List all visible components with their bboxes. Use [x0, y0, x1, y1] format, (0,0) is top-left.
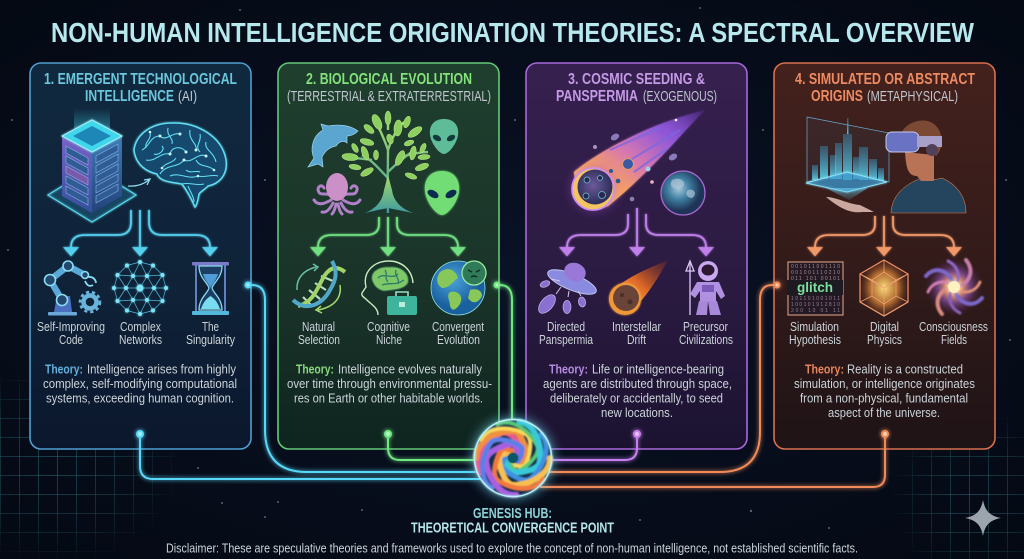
- heading: panel 4: 4. SIMULATED OR ABSTRACT: [795, 71, 975, 88]
- heading: panel 1: INTELLIGENCE: [85, 88, 174, 105]
- heading: panel 2: [287, 71, 491, 105]
- text: panel 2 theory: res on Earth or other habitable worlds.: [294, 390, 483, 406]
- label: genesis hub: GENESIS HUB:: [473, 505, 552, 522]
- heading: panel 1: 1. EMERGENT TECHNOLOGICAL: [44, 71, 237, 88]
- text: panel 2 theory: Theory:: [296, 362, 334, 376]
- labels: panel 4: Physics: [867, 333, 902, 347]
- connector: green lines to hub: [385, 282, 512, 460]
- labels: panel 4: Digital: [870, 320, 899, 334]
- labels: panel 4: Consciousness: [919, 320, 988, 334]
- icon: interstellar meteor: [609, 260, 668, 315]
- text: panel 4 theory: simulation, or intelligence originates: [794, 376, 975, 391]
- text: panel 3 theory: agents are distributed through space,: [543, 376, 732, 391]
- labels: panel 2: Natural: [302, 320, 335, 334]
- arrows: panel 1 branches: [65, 210, 216, 255]
- arrows: panel 4 branches: [809, 216, 960, 255]
- text: panel 4 theory: Theory:: [805, 362, 844, 376]
- labels: panel 2: Cognitive: [367, 320, 410, 334]
- labels: panel 2: Niche: [376, 333, 402, 347]
- text: panel 3 theory: deliberately or accidentally, to seed: [550, 390, 723, 406]
- icon: complex network: [112, 260, 168, 316]
- panel: emergent technological intelligence: [30, 63, 251, 449]
- icon: astronaut: [686, 261, 725, 315]
- text: panel 2 theory: over time through environmental pressu-: [287, 376, 492, 391]
- icon: comet: [571, 110, 705, 211]
- icon: holographic city: [806, 117, 889, 200]
- icon: glitch binary screen: 001011001110: [791, 264, 840, 270]
- labels: panel 1: The: [202, 320, 219, 334]
- text: panel 2 theory: Intelligence evolves naturally: [338, 362, 482, 376]
- icon: dolphin: [308, 124, 358, 167]
- icon: octopus: [314, 173, 360, 214]
- text: panel 4 theory: Reality is a constructed: [847, 362, 963, 376]
- icon: small alien: [430, 119, 458, 154]
- icon: sparkle watermark: [965, 500, 1001, 536]
- labels: panel 1: Code: [59, 333, 83, 347]
- icon: earth with badge: [431, 261, 486, 315]
- text: panel 1 theory: Theory:: [45, 362, 83, 376]
- labels: panel 2: Convergent: [432, 320, 484, 334]
- connector: blue lines to hub: [137, 282, 480, 479]
- labels: panel 2: Selection: [298, 333, 340, 347]
- arrow: server to brain: [128, 179, 150, 186]
- text: panel 4 theory: aspect of the universe.: [828, 405, 940, 420]
- text: panel 4 theory: from a non-physical, fundamental: [800, 390, 968, 406]
- heading: panel 3: 3. COSMIC SEEDING &: [568, 71, 705, 88]
- text: panel 1 theory: [43, 362, 237, 406]
- icon: glitch binary screen: 100101912810: [791, 302, 840, 308]
- panel: simulated or abstract origins: [774, 63, 995, 449]
- connector: orange lines to hub: [540, 282, 888, 487]
- text: panel 3 theory: [543, 362, 732, 420]
- icon: hourglass: [192, 262, 229, 315]
- heading: panel 3: PANSPERMIA: [556, 88, 638, 105]
- text: panel 1 theory: complex, self-modifying computational: [43, 376, 237, 391]
- connector: purple line to hub: [545, 431, 640, 460]
- panel: cosmic seeding and panspermia: [526, 63, 747, 449]
- heading: panel 4: ORIGINS: [811, 88, 863, 105]
- text: panel 3 theory: Life or intelligence-bearing: [592, 362, 724, 376]
- labels: panel 3: Precursor: [683, 320, 728, 334]
- label: genesis hub: THEORETICAL CONVERGENCE POINT: [411, 520, 614, 536]
- labels: panel 3: Interstellar: [612, 320, 661, 334]
- labels: panel 2: Evolution: [437, 333, 480, 347]
- labels: panel 3: Panspermia: [539, 333, 593, 347]
- labels: panel 4: [789, 320, 988, 347]
- icon: robot arm and gear: [44, 261, 100, 316]
- text: panel 3 theory: Theory:: [549, 362, 588, 376]
- labels: panel 4: Hypothesis: [789, 333, 841, 347]
- icon: glitch binary screen: 001001110210: [791, 270, 840, 276]
- heading: panel 4: (METAPHYSICAL): [867, 88, 958, 105]
- text: panel 1 theory: Intelligence arises from highly: [87, 362, 236, 376]
- icon: glitch binary screen: [787, 262, 843, 315]
- heading: panel 2: (TERRESTRIAL & EXTRATERRESTRIAL): [287, 88, 491, 105]
- labels: panel 1: Singularity: [186, 333, 236, 347]
- icon: glitch binary screen: 200 10 01 11: [791, 308, 840, 314]
- arrows: panel 2 branches: [312, 217, 464, 255]
- heading: panel 4: [795, 71, 975, 105]
- text: panel 4 theory: [794, 362, 975, 420]
- heading: panel 1: (AI): [178, 88, 197, 105]
- icon: glitch binary screen: glitch: [797, 279, 833, 295]
- labels: panel 1: Networks: [119, 333, 162, 347]
- heading: panel 2: 2. BIOLOGICAL EVOLUTION: [306, 71, 472, 88]
- labels: panel 3: Directed: [547, 320, 585, 334]
- heading: panel 3: (EXOGENOUS): [643, 88, 717, 105]
- icon: digital physics hexagon: [860, 260, 908, 316]
- icon: cognitive niche: [362, 261, 417, 315]
- icon: consciousness galaxy: [925, 258, 983, 316]
- icon: tree: [342, 111, 430, 213]
- labels: panel 4: Fields: [941, 333, 967, 347]
- labels: panel 3: Drift: [627, 333, 646, 347]
- disclaimer: Disclaimer: These are speculative theories and frameworks used to explore the concept of non-human intelligence, not established scientific facts.: [166, 540, 858, 556]
- text: panel 2 theory: [287, 362, 492, 406]
- icon: planet: [661, 171, 705, 215]
- labels: panel 1: Self-Improving: [37, 320, 105, 334]
- icon: server tower: [48, 108, 136, 222]
- arrows: panel 3 branches: [561, 208, 712, 255]
- icon: person with VR headset: [826, 120, 966, 213]
- text: panel 1 theory: systems, exceeding human cognition.: [46, 390, 234, 406]
- genesis hub swirl: [468, 413, 559, 501]
- heading: panel 3: [556, 71, 717, 105]
- labels: panel 3: Civilizations: [679, 333, 733, 347]
- text: panel 3 theory: new locations.: [601, 405, 673, 420]
- labels: panel 4: Simulation: [790, 320, 839, 334]
- icon: large alien: [425, 171, 459, 215]
- icon: glitch binary screen: 011 101 00101: [791, 276, 840, 282]
- heading: panel 1: [44, 71, 237, 105]
- labels: panel 2: [298, 320, 484, 347]
- labels: panel 1: [37, 320, 236, 347]
- panel: biological evolution: [278, 63, 499, 449]
- icon: DNA helix: [293, 261, 345, 313]
- icon: directed panspermia UFO: [535, 260, 599, 316]
- labels: panel 3: [539, 320, 733, 347]
- icon: glowing brain: [134, 123, 226, 207]
- labels: panel 1: Complex: [120, 320, 162, 334]
- icon: glitch binary screen: 101101001011: [791, 296, 840, 302]
- label: genesis hub: [411, 505, 614, 536]
